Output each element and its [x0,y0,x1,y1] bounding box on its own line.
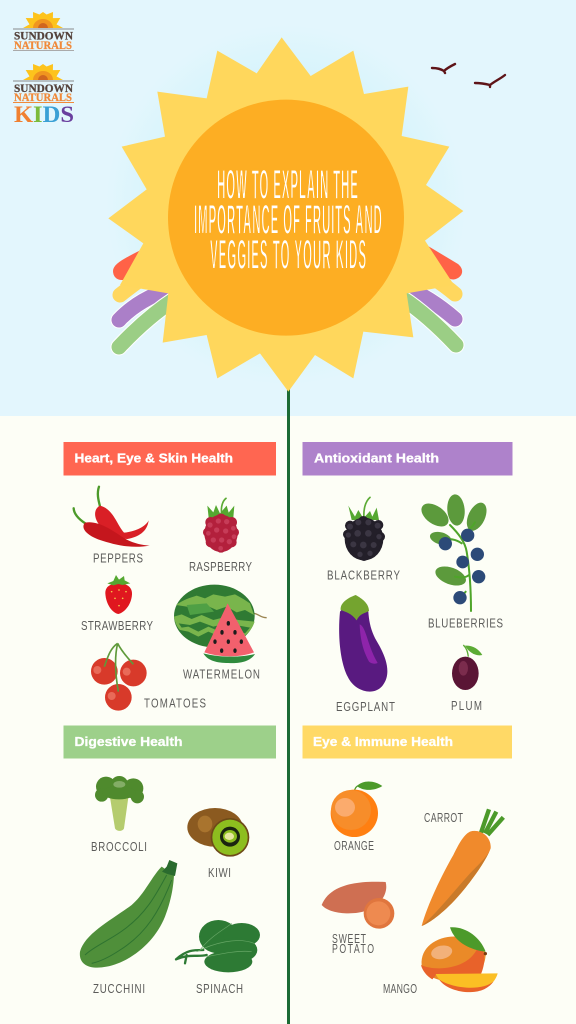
labels: digestive group: ZUCCHINI [93,983,145,996]
labels: heart group: WATERMELON [183,668,260,682]
labels: digestive group [91,841,243,996]
logo: Sundown Naturals Kids [13,64,74,127]
logo: Sundown Naturals Kids: SUNDOWN [14,81,73,95]
labels: antioxidant group: BLACKBERRY [327,569,400,583]
icon: spinach [176,920,260,972]
illustrations: immune group [322,781,503,992]
labels: digestive group: BROCCOLI [91,841,147,854]
panel: digestive health [64,726,276,996]
logo: Sundown Naturals: NATURALS [14,38,72,52]
heading: heart, eye and skin health: Heart, Eye & Skin Health [74,450,233,466]
illustrations: antioxidant group [339,494,491,692]
icon: strawberry [105,575,132,614]
heading: antioxidant health [302,442,512,476]
icon: plum [452,645,482,690]
logo: Sundown Naturals Kids: KIDS [14,102,74,127]
logo: Sundown Naturals Kids: NATURALS [14,90,72,104]
sky background [0,0,576,416]
labels: immune group: SWEET [332,933,366,946]
title: IMPORTANCE OF FRUITS AND [194,194,382,244]
icon: tomatoes [91,643,147,711]
icon: blackberry [343,497,385,561]
heading: eye and immune health: Eye & Immune Health [313,734,453,749]
heading: digestive health: Digestive Health [74,734,183,749]
labels: immune group: POTATO [332,943,374,956]
cream lower background [0,416,576,1024]
sun glow [106,25,466,385]
labels: heart group: STRAWBERRY [81,620,153,633]
labels: antioxidant group [327,569,503,714]
panel: heart, eye and skin health [64,442,276,711]
heading: digestive health [64,726,276,758]
title [194,159,382,279]
icon: mango [421,927,498,992]
icon: raspberry [203,498,239,553]
icon: peppers [74,487,150,547]
illustrations: digestive group [80,776,260,972]
labels: immune group [332,812,463,996]
logo: Sundown Naturals [13,12,74,52]
panel: eye and immune health [302,726,512,996]
labels: heart group: RASPBERRY [189,561,252,574]
panel: antioxidant health [302,442,512,714]
icon: orange [331,781,382,837]
birds [432,64,505,87]
labels: digestive group: SPINACH [196,983,243,996]
stem divider [287,388,290,1024]
labels: heart group [81,552,260,711]
icon: sweet potato [322,882,394,929]
icon: zucchini [80,860,177,968]
icon: carrot [422,809,503,926]
title: HOW TO EXPLAIN THE [217,159,358,209]
illustrations: heart group [74,487,267,711]
heading: heart, eye and skin health [64,442,276,476]
labels: heart group: PEPPERS [93,552,143,566]
rainbow rays left [113,250,175,347]
labels: heart group: TOMATOES [144,697,206,711]
labels: immune group: MANGO [383,983,417,996]
labels: antioxidant group: EGGPLANT [336,701,395,714]
labels: antioxidant group: PLUM [451,700,482,713]
icon: watermelon [174,585,267,663]
heading: eye and immune health [302,726,512,758]
heading: antioxidant health: Antioxidant Health [314,450,439,466]
labels: digestive group: KIWI [208,867,231,880]
logo: Sundown Naturals: SUNDOWN [14,28,73,42]
rainbow rays right [402,246,462,345]
icon: broccoli [95,776,144,831]
labels: immune group: CARROT [424,812,463,825]
icon: blueberries [417,494,491,611]
title: VEGGIES TO YOUR KIDS [210,229,366,279]
icon: eggplant [339,595,387,692]
sun [108,37,463,392]
labels: immune group: ORANGE [334,840,374,853]
labels: antioxidant group: BLUEBERRIES [428,617,503,631]
icon: kiwi [187,808,249,857]
